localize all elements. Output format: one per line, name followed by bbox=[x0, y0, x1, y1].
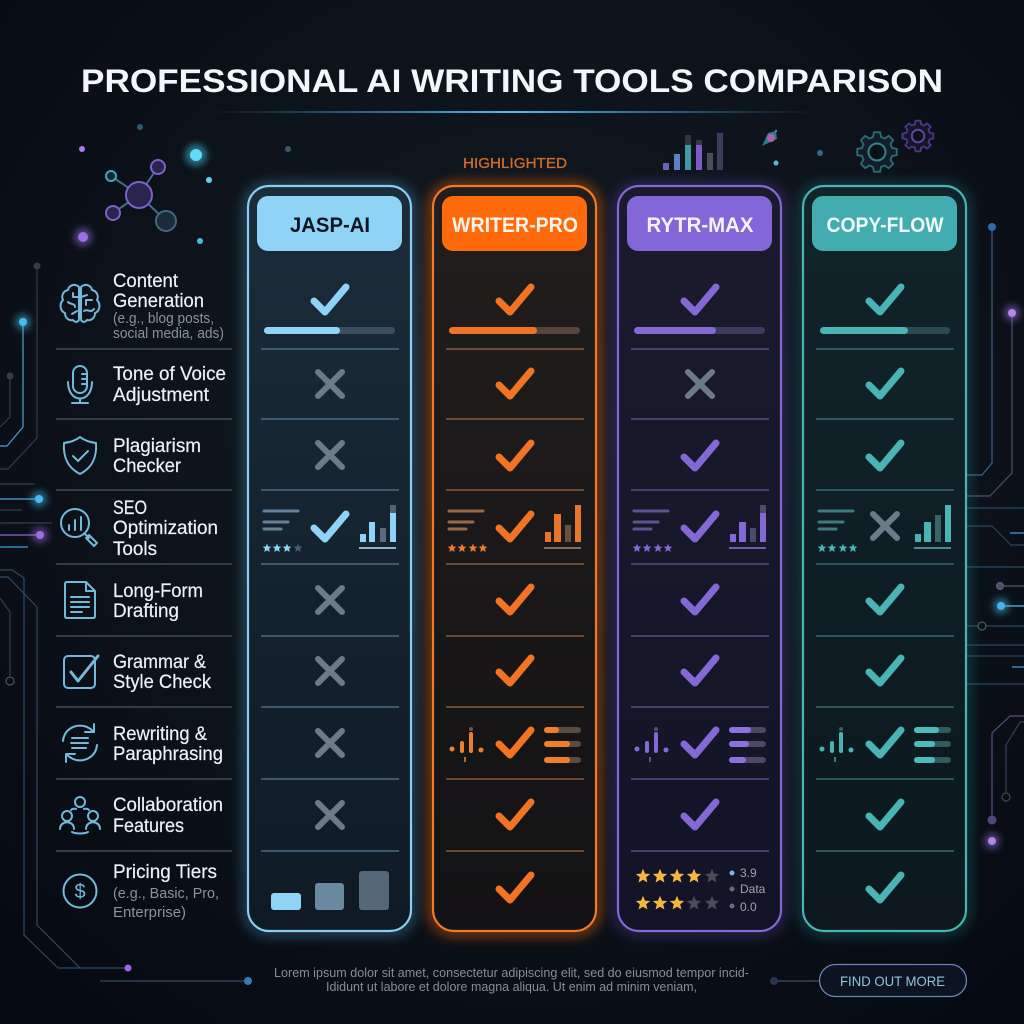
check bbox=[499, 802, 531, 827]
footer text: Lorem ipsum dolor sit amet, consectetur adipiscing elit, sed do eiusmod tempor incid- bbox=[274, 966, 749, 980]
check bbox=[499, 658, 531, 683]
check bbox=[869, 802, 901, 827]
feature: long-form drafting bbox=[65, 581, 203, 622]
check bbox=[684, 658, 716, 683]
check bbox=[499, 587, 531, 612]
feature: content generation bbox=[61, 271, 224, 342]
find out more button bbox=[770, 964, 966, 996]
header: jasp-ai: JASP-AI bbox=[290, 214, 370, 237]
check bbox=[684, 287, 716, 312]
star ratings: 0.0 bbox=[740, 900, 757, 914]
feature: pricing tiers bbox=[64, 862, 219, 921]
feature: rewriting: Rewriting & bbox=[113, 724, 207, 745]
feature: content generation: social media, ads) bbox=[113, 326, 224, 342]
feature: collaboration: Features bbox=[113, 816, 184, 837]
header: jasp-ai bbox=[257, 196, 402, 251]
check bbox=[314, 287, 346, 312]
progress bar bbox=[820, 327, 950, 334]
star ratings: Data bbox=[740, 882, 766, 896]
check bbox=[684, 514, 716, 539]
find out more button: FIND OUT MORE bbox=[840, 973, 945, 989]
feature: plagiarism bbox=[64, 436, 201, 477]
feature: long-form drafting: Drafting bbox=[113, 601, 179, 622]
footer text: Ididunt ut labore et dolore magna aliqua. Ut enim ad minim veniam, bbox=[326, 980, 697, 994]
header: copy-flow bbox=[812, 196, 957, 251]
seo widgets bbox=[263, 505, 396, 552]
check bbox=[314, 514, 346, 539]
check bbox=[869, 443, 901, 468]
feature: content generation: Generation bbox=[113, 291, 204, 312]
header: writer-pro: WRITER-PRO bbox=[452, 214, 578, 237]
feature: collaboration bbox=[60, 795, 223, 837]
feature: rewriting bbox=[63, 724, 223, 765]
panel: copy-flow bbox=[802, 186, 967, 932]
check bbox=[684, 802, 716, 827]
seo widgets bbox=[448, 505, 581, 552]
check bbox=[499, 514, 531, 539]
feature: content generation: (e.g., blog posts, bbox=[113, 311, 214, 327]
feature: plagiarism: Plagiarism bbox=[113, 436, 201, 457]
title underline bbox=[210, 111, 815, 113]
cross bbox=[873, 514, 897, 538]
title: PROFESSIONAL AI WRITING TOOLS COMPARISON bbox=[81, 63, 943, 99]
check bbox=[869, 371, 901, 396]
check bbox=[499, 287, 531, 312]
header: rytr-max: RYTR-MAX bbox=[646, 214, 754, 237]
pricing tier bars bbox=[271, 871, 389, 910]
check bbox=[869, 730, 901, 755]
activity and list widgets bbox=[820, 727, 951, 763]
progress bar bbox=[449, 327, 580, 334]
left circuit decoration bbox=[0, 262, 252, 985]
check bbox=[684, 730, 716, 755]
feature: seo: Tools bbox=[113, 539, 157, 560]
panel: rytr-max bbox=[617, 186, 782, 932]
mini bar chart decoration bbox=[663, 133, 723, 170]
feature: grammar and style bbox=[64, 652, 211, 693]
feature: plagiarism: Checker bbox=[113, 456, 182, 477]
cross bbox=[318, 443, 342, 467]
feature: tone of voice bbox=[68, 364, 226, 406]
seo widgets bbox=[818, 505, 951, 552]
progress bar bbox=[264, 327, 395, 334]
feature: seo: SEO bbox=[113, 498, 147, 519]
footer text bbox=[274, 966, 749, 994]
check bbox=[499, 371, 531, 396]
check bbox=[499, 443, 531, 468]
feature: grammar and style: Grammar & bbox=[113, 652, 206, 673]
feature: tone of voice: Adjustment bbox=[113, 385, 210, 406]
feature: seo bbox=[61, 498, 218, 560]
check bbox=[869, 287, 901, 312]
activity and list widgets bbox=[450, 727, 581, 763]
highlighted label: HIGHLIGHTED bbox=[463, 155, 567, 172]
feature: seo: Optimization bbox=[113, 518, 218, 539]
cross bbox=[318, 731, 342, 755]
icon: rocket bbox=[762, 130, 777, 146]
check bbox=[684, 443, 716, 468]
star ratings bbox=[636, 866, 766, 914]
panel: writer-pro bbox=[432, 186, 597, 932]
feature: grammar and style: Style Check bbox=[113, 672, 211, 693]
icon: teal gear bbox=[857, 132, 897, 172]
floating dots left bbox=[74, 124, 291, 246]
cross bbox=[318, 659, 342, 683]
icon: purple gear bbox=[903, 121, 933, 151]
feature: tone of voice: Tone of Voice bbox=[113, 364, 226, 385]
progress bar bbox=[634, 327, 765, 334]
feature: pricing tiers: (e.g., Basic, Pro, bbox=[113, 886, 219, 902]
feature: rewriting: Paraphrasing bbox=[113, 744, 223, 765]
icon: molecule network bbox=[106, 160, 176, 231]
check bbox=[869, 875, 901, 900]
cross bbox=[318, 372, 342, 396]
right circuit decoration bbox=[967, 223, 1024, 849]
header: writer-pro bbox=[442, 196, 587, 251]
check bbox=[499, 875, 531, 900]
cross bbox=[688, 372, 712, 396]
feature: pricing tiers: Pricing Tiers bbox=[113, 862, 217, 883]
activity and list widgets bbox=[634, 727, 766, 763]
feature labels bbox=[56, 271, 232, 921]
feature: pricing tiers: $ bbox=[74, 881, 86, 903]
star ratings: 3.9 bbox=[740, 866, 757, 880]
check bbox=[869, 587, 901, 612]
feature: pricing tiers: Enterprise) bbox=[113, 905, 186, 921]
feature: content generation: Content bbox=[113, 271, 179, 292]
floating dots right bbox=[774, 150, 823, 166]
feature: collaboration: Collaboration bbox=[113, 795, 223, 816]
cross bbox=[318, 803, 342, 827]
panel: jasp-ai bbox=[247, 186, 412, 932]
check bbox=[869, 658, 901, 683]
header: rytr-max bbox=[627, 196, 772, 251]
header: copy-flow: COPY-FLOW bbox=[826, 214, 944, 237]
feature: long-form drafting: Long-Form bbox=[113, 581, 203, 602]
cross bbox=[318, 588, 342, 612]
check bbox=[684, 587, 716, 612]
seo widgets bbox=[633, 505, 766, 552]
check bbox=[499, 730, 531, 755]
